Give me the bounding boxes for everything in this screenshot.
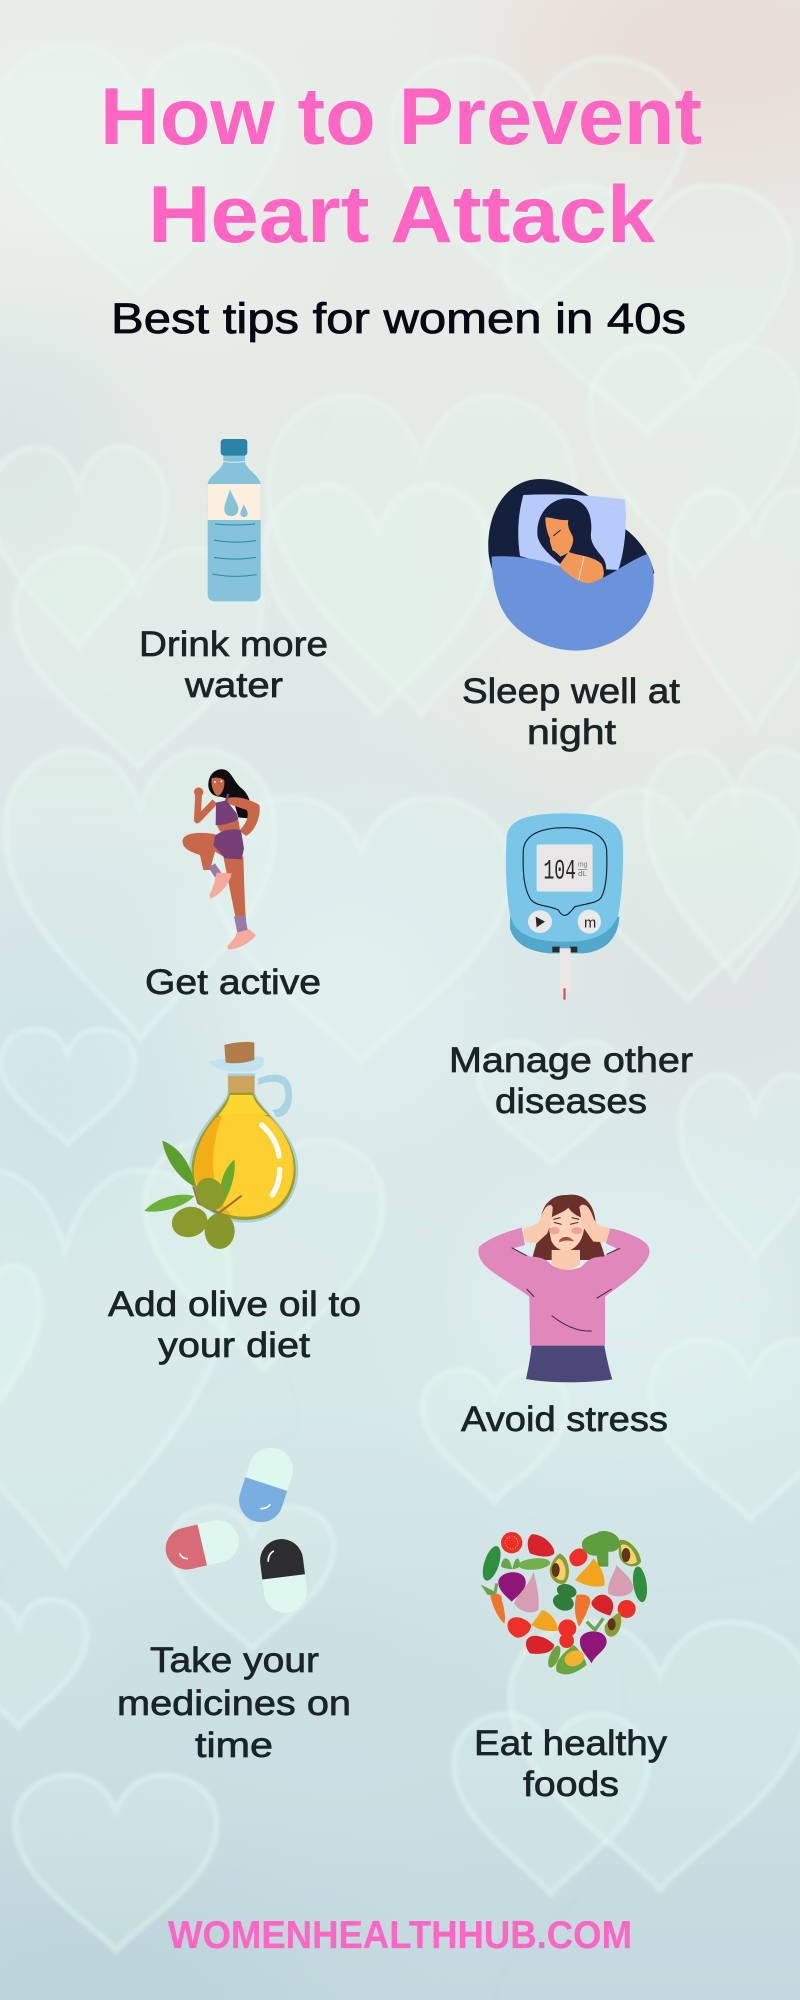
label: manage other diseases bbox=[449, 1041, 693, 1121]
icon: glucose meter: dL bbox=[578, 869, 587, 878]
icon: water bottle bbox=[208, 439, 261, 601]
label: eat healthy foods: Eat healthy bbox=[474, 1724, 668, 1763]
blue pill bbox=[233, 1442, 299, 1528]
label: drink more water bbox=[139, 625, 328, 705]
title: How to Prevent bbox=[100, 72, 702, 162]
label: get active: Get active bbox=[145, 963, 321, 1002]
label: take your medicines on time: time bbox=[195, 1726, 273, 1765]
icon: pills bbox=[161, 1442, 309, 1615]
label: add olive oil to your diet: Add olive oil to bbox=[108, 1285, 361, 1324]
label: manage other diseases: diseases bbox=[495, 1082, 647, 1121]
subtitle: Best tips for women in 40s bbox=[111, 295, 686, 343]
red pill bbox=[161, 1516, 243, 1574]
label: take your medicines on time: medicines on bbox=[117, 1684, 351, 1723]
label: drink more water: Drink more bbox=[139, 625, 328, 664]
icon: olive oil bottle bbox=[144, 1042, 298, 1249]
title: Heart Attack bbox=[148, 170, 656, 260]
icon: glucose meter: 104 bbox=[543, 857, 576, 888]
label: manage other diseases: Manage other bbox=[449, 1041, 693, 1080]
label: eat healthy foods bbox=[474, 1724, 668, 1804]
label: drink more water: water bbox=[184, 666, 283, 705]
icon: glucose meter bbox=[506, 813, 623, 1000]
label: eat healthy foods: foods bbox=[523, 1765, 619, 1804]
title bbox=[100, 72, 702, 260]
icon: glucose meter: mg bbox=[578, 860, 587, 869]
label: add olive oil to your diet bbox=[108, 1285, 361, 1365]
icon: glucose meter: m bbox=[584, 915, 596, 931]
icon: sleeping woman bbox=[488, 479, 654, 651]
label: avoid stress: Avoid stress bbox=[461, 1400, 668, 1439]
icon: vegetable heart bbox=[479, 1531, 649, 1674]
icon: stressed woman bbox=[478, 1195, 649, 1382]
label: sleep well at night bbox=[462, 672, 680, 752]
icon: woman running bbox=[183, 769, 260, 949]
label: take your medicines on time bbox=[117, 1641, 351, 1765]
label: take your medicines on time: Take your bbox=[150, 1641, 319, 1680]
footer website: WOMENHEALTHHUB.COM bbox=[168, 1914, 632, 1957]
label: sleep well at night: night bbox=[527, 713, 616, 752]
black pill bbox=[258, 1537, 309, 1615]
label: sleep well at night: Sleep well at bbox=[462, 672, 680, 711]
label: add olive oil to your diet: your diet bbox=[158, 1326, 310, 1365]
